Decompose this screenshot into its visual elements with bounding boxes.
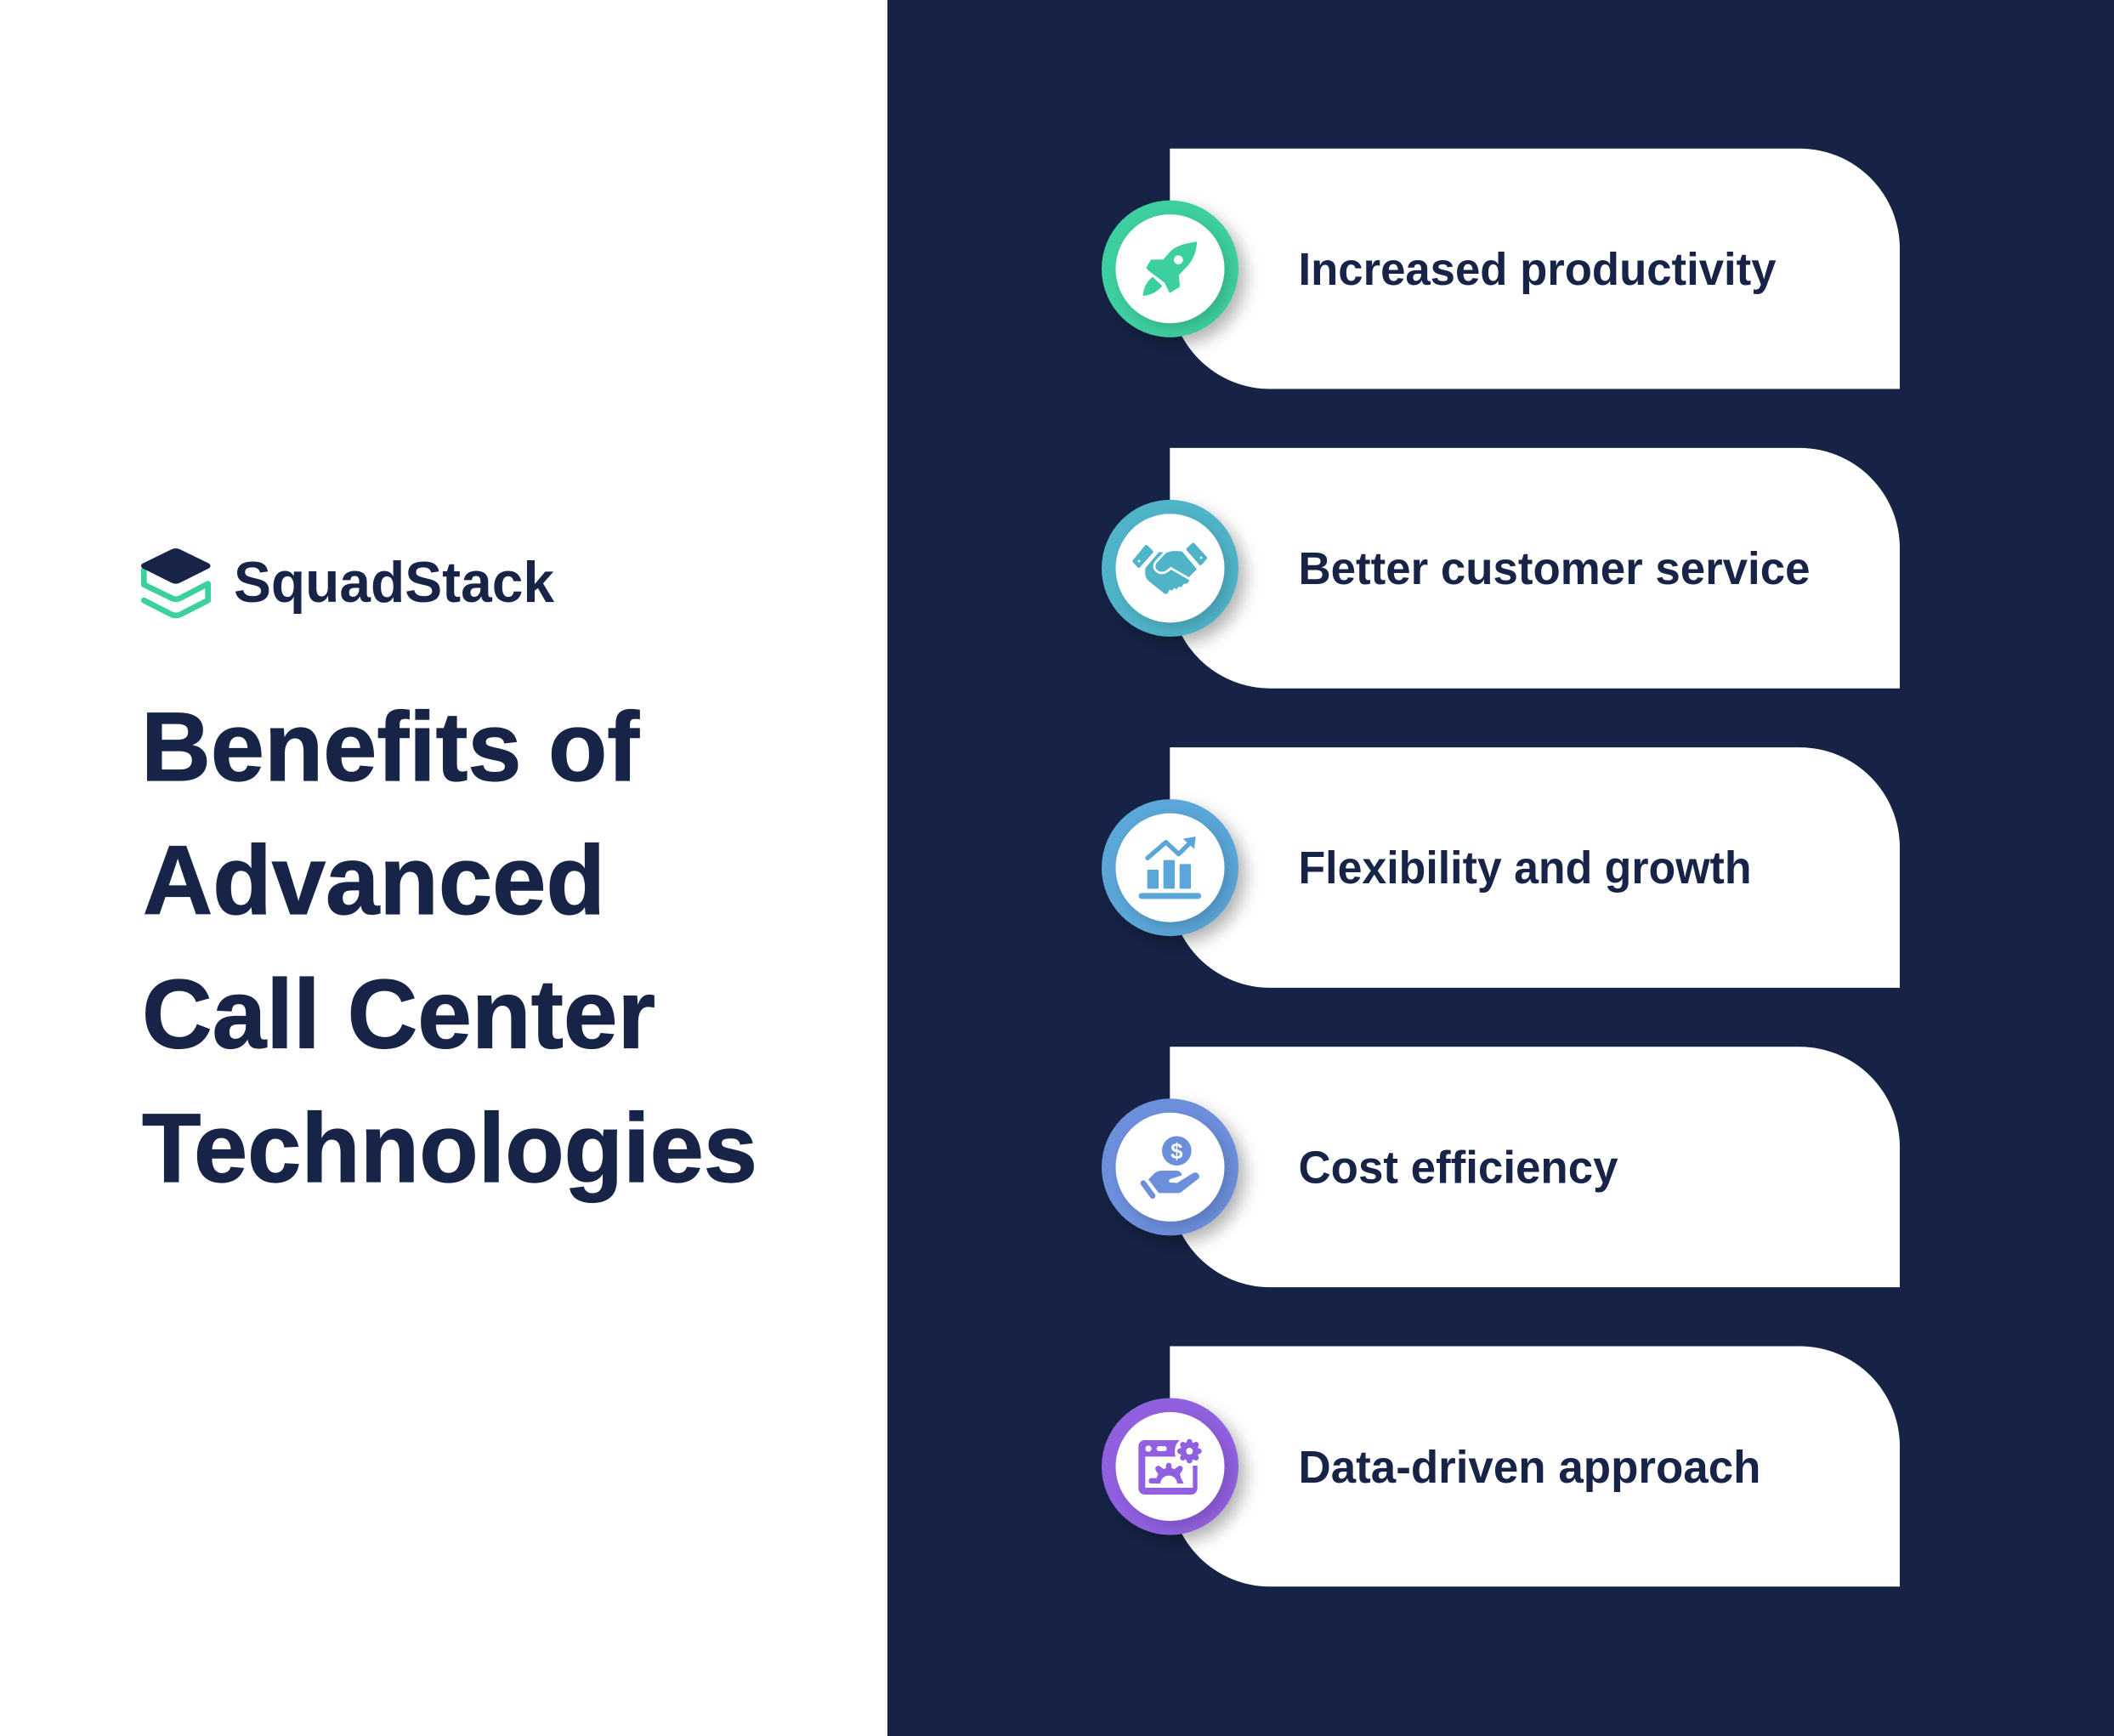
label: Better customer service: [1299, 543, 1811, 594]
icon: handshake: [1132, 542, 1207, 594]
card: Data-driven approach: [1102, 1347, 1900, 1586]
title: Technologies: [142, 1094, 757, 1203]
title: [141, 693, 757, 1203]
label: Increased productivity: [1299, 244, 1777, 295]
icon ring: teal: [1102, 500, 1238, 637]
label: Data-driven approach: [1299, 1442, 1761, 1493]
card shape: [1170, 1047, 1900, 1287]
card shape: [1170, 747, 1900, 988]
icon: hand holding coin: [1143, 1136, 1199, 1196]
icon ring: blue: [1102, 799, 1238, 936]
card shape: [1170, 149, 1900, 389]
logo: SquadStack: [141, 548, 554, 616]
icon: growth chart: [1139, 837, 1201, 899]
card shape: [1170, 1347, 1900, 1586]
icon: data window with gears: [1138, 1437, 1204, 1495]
icon: stacked layers logo mark: [141, 548, 211, 616]
icon ring: green: [1102, 201, 1238, 338]
title: Advanced: [143, 826, 605, 935]
logo wordmark: SquadStack: [234, 550, 554, 615]
background: white left side: [0, 0, 887, 1736]
label: Cost efficiency: [1299, 1143, 1618, 1194]
label: Flexibility and growth: [1299, 842, 1751, 894]
icon ring: purple: [1102, 1398, 1238, 1535]
card: Increased productivity: [1102, 149, 1900, 389]
card shape: [1170, 448, 1900, 689]
card: Better customer service: [1102, 448, 1900, 689]
card: Flexibility and growth: [1102, 747, 1900, 988]
icon: rocket: [1143, 241, 1197, 296]
title: Call Center: [142, 961, 655, 1069]
icon ring: periwinkle: [1102, 1098, 1238, 1235]
title: Benefits of: [141, 693, 640, 802]
panel: dark right side: [887, 0, 2114, 1736]
icon: hand holding coin: $: [1170, 1138, 1183, 1164]
card: Cost efficiency: [1102, 1047, 1900, 1287]
